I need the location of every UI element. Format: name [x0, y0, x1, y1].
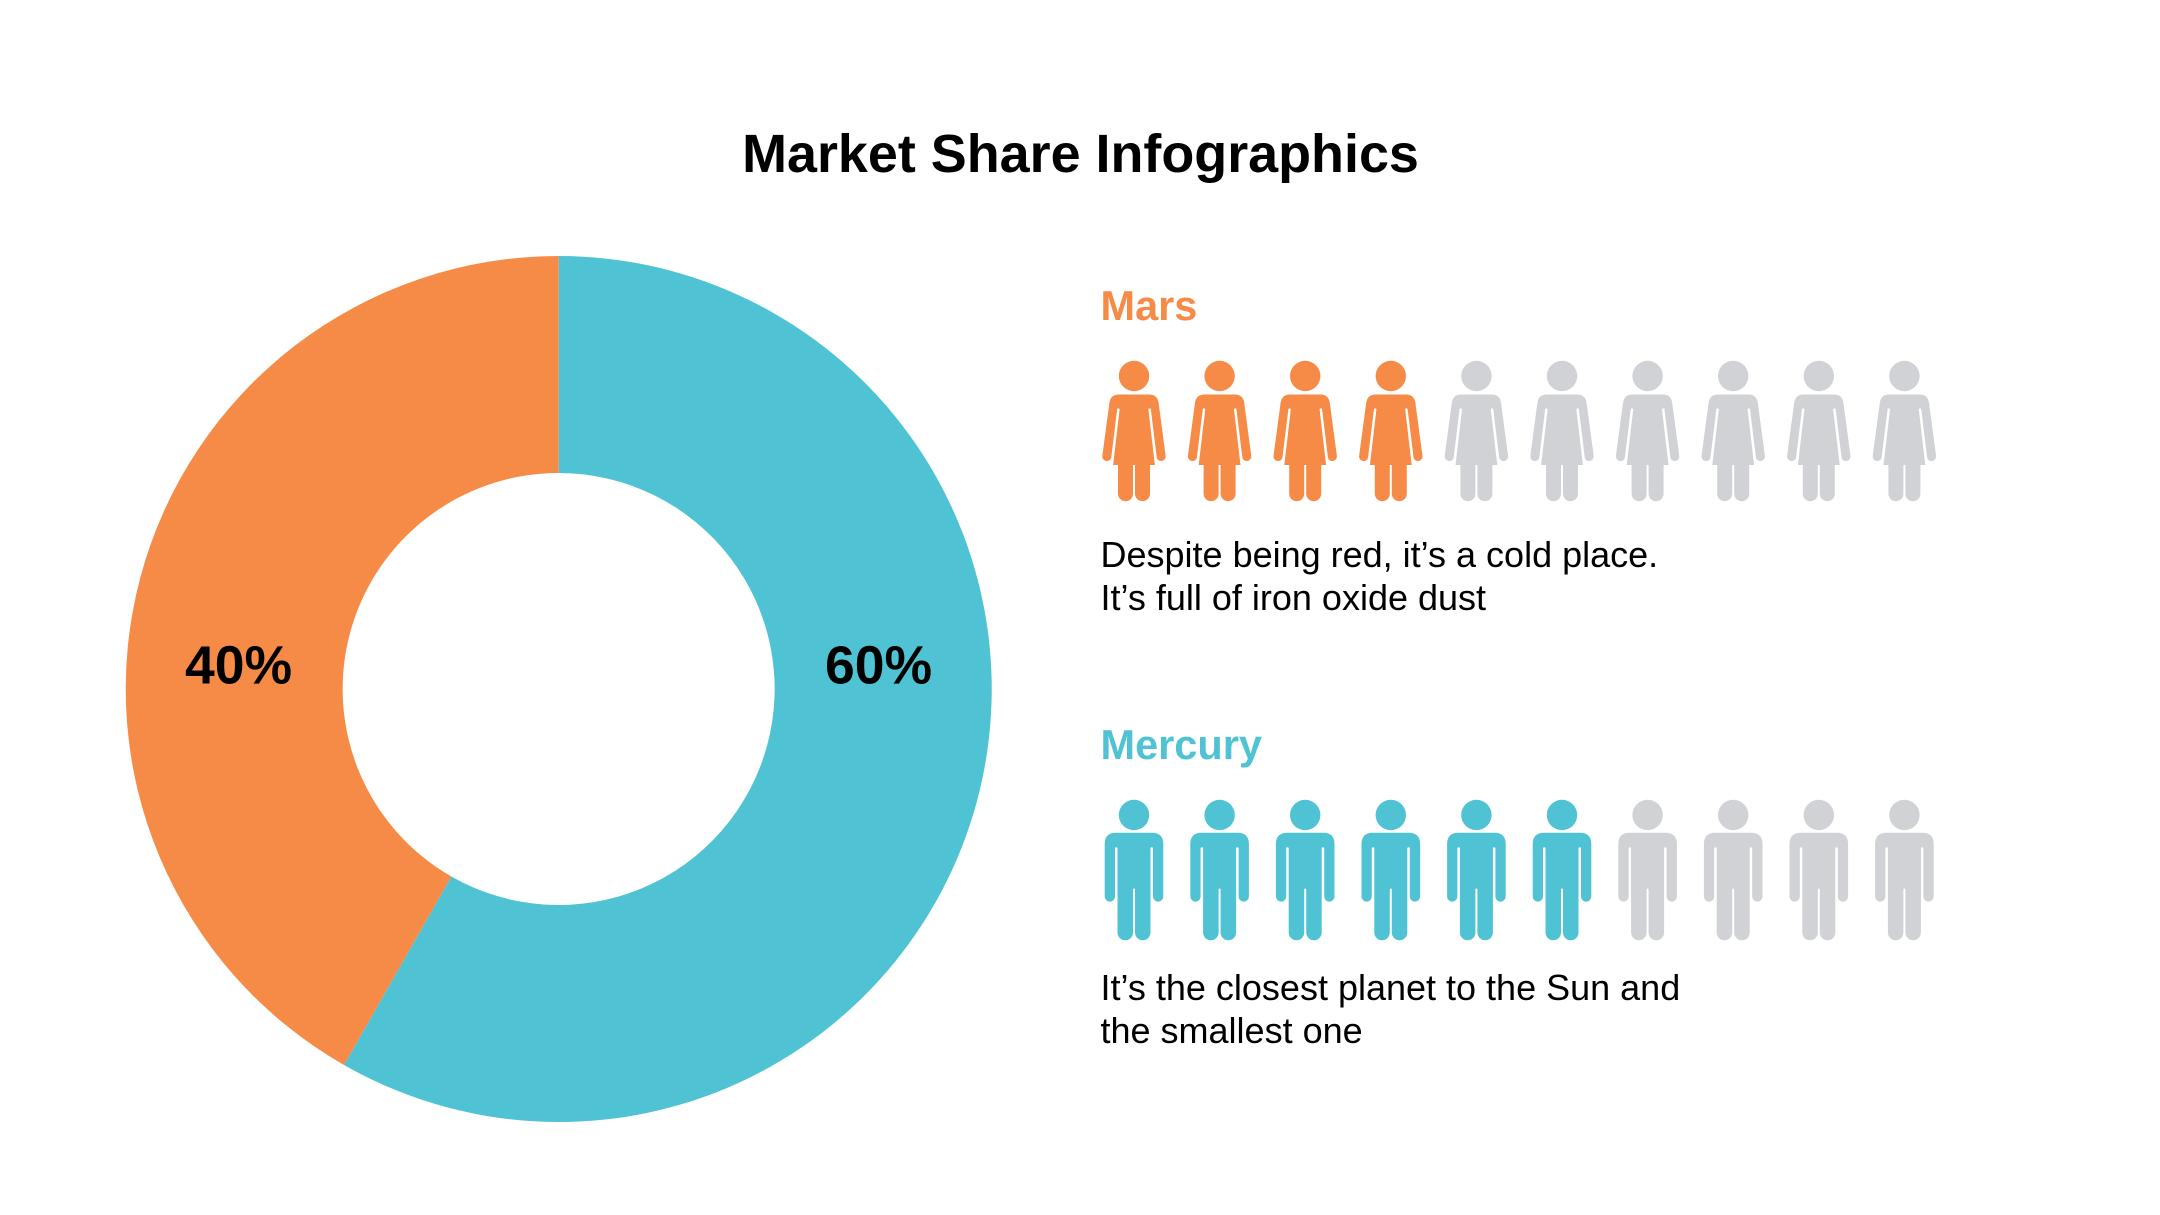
pictogram row: Mars 4 of 10 — [1102, 361, 1936, 501]
text block: Mars description: Despite being red, it’s a cold place. — [1100, 534, 1658, 575]
heading: Mars: Mars — [1100, 282, 1197, 329]
panel: Mars — [1100, 282, 1936, 618]
label: 40%: 40% — [185, 636, 292, 696]
text block: Mars description: It’s full of iron oxide dust — [1100, 577, 1486, 618]
text block: Mercury description: the smallest one — [1100, 1010, 1363, 1051]
donut segment: Mercury 60% — [344, 256, 992, 1122]
title: Market Share Infographics — [742, 124, 1419, 184]
panel: Mercury — [1100, 721, 1934, 1051]
label: 60%: 60% — [825, 636, 932, 696]
pictogram row: Mercury 6 of 10 — [1105, 800, 1934, 940]
heading: Mercury: Mercury — [1100, 721, 1262, 768]
donut chart — [126, 256, 992, 1122]
donut segment: Mars 40% — [126, 256, 559, 1065]
text block: Mercury description: It’s the closest planet to the Sun and — [1100, 967, 1680, 1008]
